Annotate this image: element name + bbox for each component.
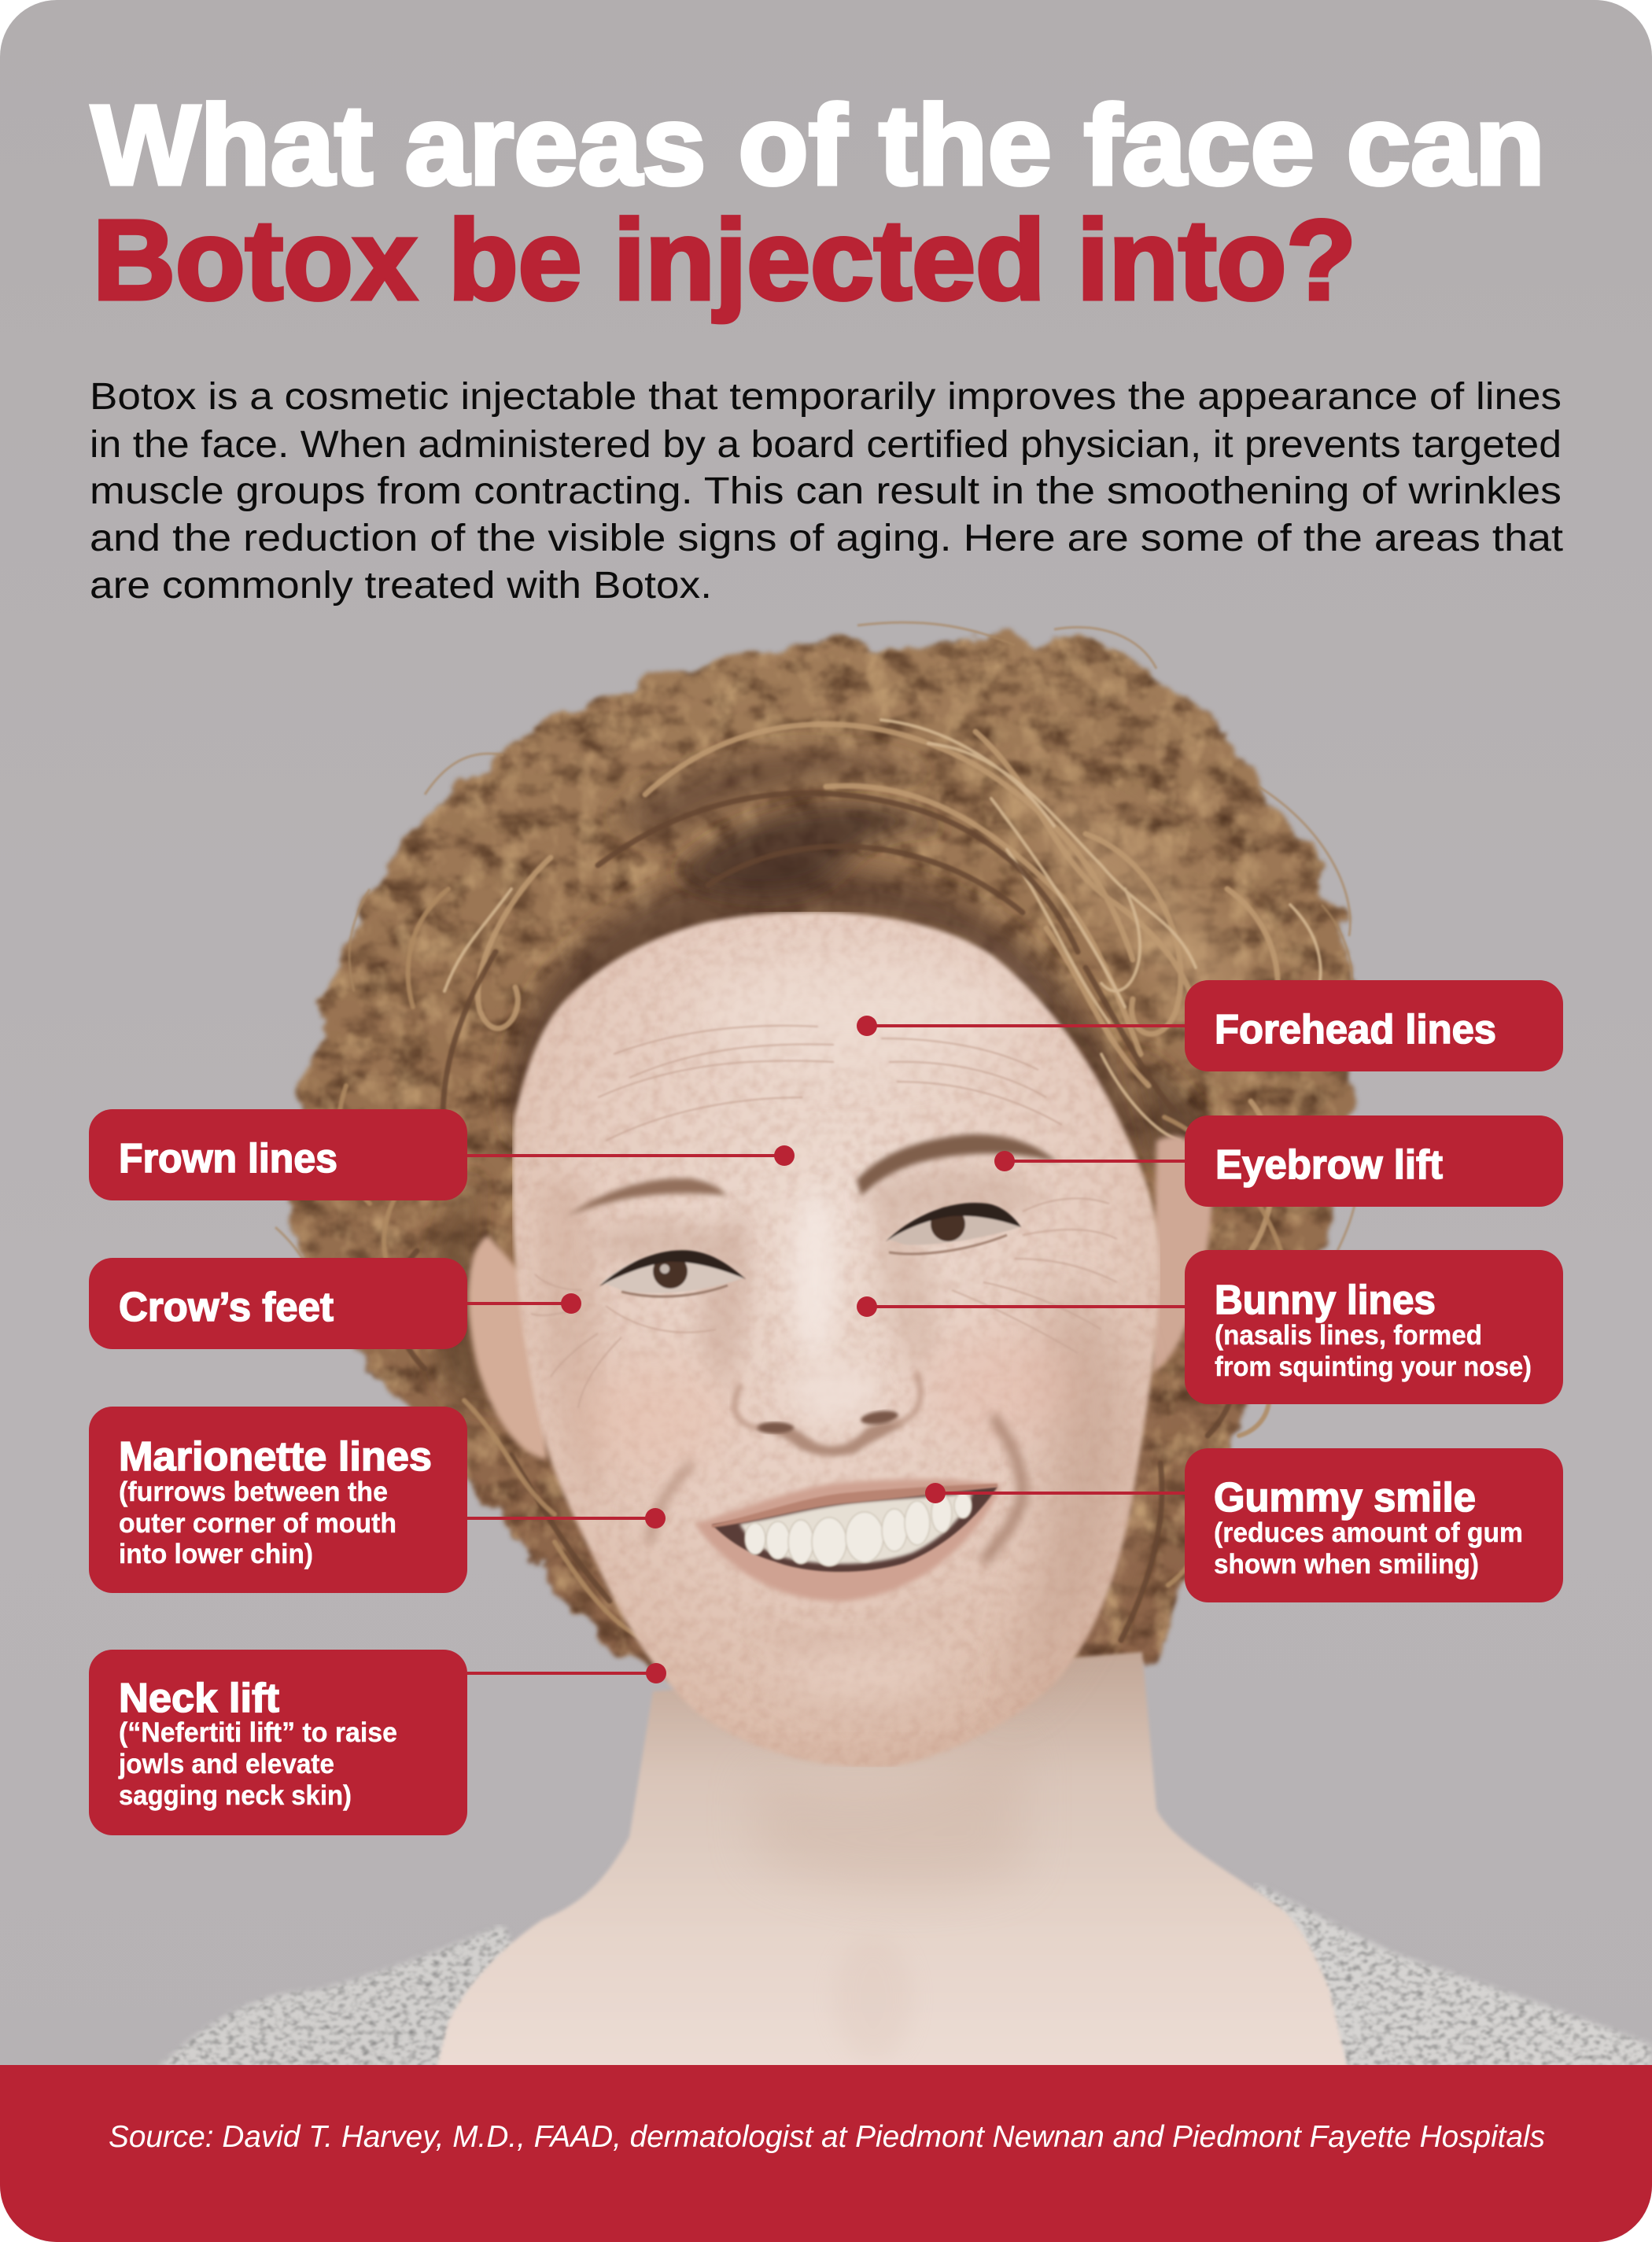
callout: marionette lines: outer corner of mouth — [119, 1508, 396, 1539]
ears — [468, 1136, 1211, 1459]
flyaway curls — [274, 620, 1356, 1258]
callout: bunny lines — [857, 1250, 1563, 1404]
intro paragraph: muscle groups from contracting. This can result in the smoothening of wrinkles — [90, 470, 1562, 512]
title — [91, 82, 1545, 323]
callout: eyebrow lift: Eyebrow lift — [1215, 1142, 1443, 1188]
callout: neck lift: Neck lift — [119, 1676, 279, 1721]
facial shading — [541, 960, 1123, 1724]
sweater — [157, 1882, 1652, 2069]
mouth interior — [712, 1487, 997, 1572]
intro paragraph — [90, 376, 1563, 607]
callout: neck lift: jowls and elevate — [118, 1749, 334, 1779]
hair strands — [338, 720, 1321, 1640]
callout: gummy smile: Gummy smile — [1214, 1475, 1476, 1521]
mouth — [695, 1479, 1001, 1601]
title line one: What areas of the face can — [91, 82, 1545, 208]
forehead and eye wrinkles — [531, 1026, 1117, 1408]
teeth band — [739, 1493, 972, 1564]
upper lip edge — [712, 1484, 997, 1528]
source text: Source: David T. Harvey, M.D., FAAD, dermatologist at Piedmont Newnan and Piedmont Fayette Hospitals — [109, 2120, 1545, 2154]
callout: gummy smile: (reduces amount of gum — [1214, 1517, 1523, 1548]
title line two: Botox be injected into? — [93, 197, 1356, 323]
callout: gummy smile: shown when smiling) — [1214, 1549, 1479, 1580]
callout: neck lift — [89, 1650, 666, 1835]
intro paragraph: are commonly treated with Botox. — [90, 565, 712, 607]
callout: bunny lines: from squinting your nose) — [1215, 1351, 1532, 1382]
neck and chest — [437, 1652, 1348, 2069]
nose — [649, 1373, 1023, 1562]
neck shading — [755, 1731, 1023, 2061]
callout: frown lines: Frown lines — [119, 1136, 337, 1182]
callout: frown lines — [89, 1109, 795, 1200]
callout: bunny lines: (nasalis lines, formed — [1215, 1320, 1482, 1351]
callout: marionette lines: into lower chin) — [119, 1539, 313, 1569]
callout: marionette lines — [89, 1407, 666, 1593]
callout: bunny lines: Bunny lines — [1215, 1278, 1436, 1323]
lips — [695, 1479, 1001, 1601]
chin highlight — [771, 1644, 960, 1707]
callout: crow's feet: Crow’s feet — [119, 1285, 334, 1330]
intro paragraph: in the face. When administered by a board certified physician, it prevents targeted — [90, 424, 1562, 466]
callout: crow's feet — [89, 1258, 581, 1349]
callout: eyebrow lift — [994, 1115, 1563, 1207]
callout: marionette lines: Marionette lines — [119, 1434, 432, 1480]
left eye — [599, 1250, 746, 1296]
callout: neck lift: (“Nefertiti lift” to raise — [119, 1717, 397, 1748]
callout: forehead lines: Forehead lines — [1215, 1007, 1496, 1053]
intro paragraph: and the reduction of the visible signs of aging. Here are some of the areas that — [90, 518, 1563, 559]
intro paragraph: Botox is a cosmetic injectable that temporarily improves the appearance of lines — [90, 376, 1562, 418]
teeth — [745, 1493, 972, 1566]
hair mass — [275, 622, 1358, 1687]
face — [512, 912, 1160, 1767]
right eye — [886, 1203, 1021, 1254]
callout: neck lift: sagging neck skin) — [119, 1780, 352, 1811]
footer source band — [0, 2065, 1652, 2242]
eyebrows — [567, 1134, 1058, 1216]
portrait photo of woman — [157, 622, 1652, 2069]
callout: gummy smile — [925, 1448, 1563, 1602]
dark roots — [509, 868, 1156, 1164]
callout: marionette lines: (furrows between the — [119, 1477, 388, 1507]
callout: forehead lines — [857, 980, 1563, 1071]
